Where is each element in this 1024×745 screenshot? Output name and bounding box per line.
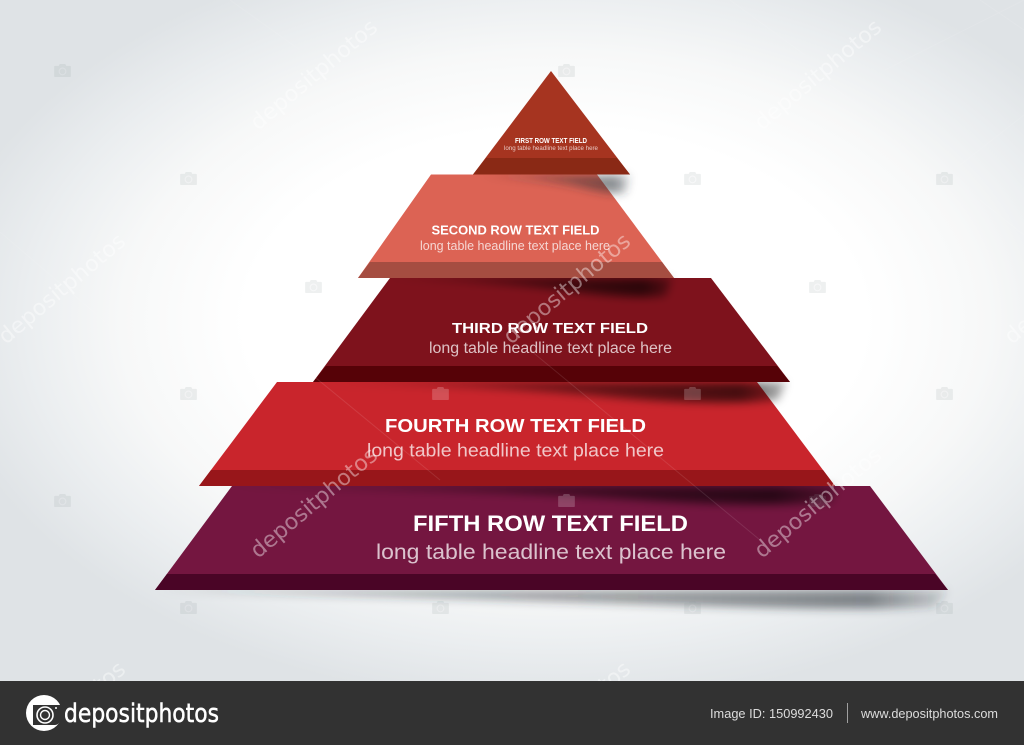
divider (847, 703, 848, 723)
tier: first row (473, 71, 630, 174)
shadow of second row (385, 278, 672, 297)
watermark text: depositphotos (750, 15, 887, 136)
drop shadow under fifth row (155, 590, 948, 609)
icon: camera logo (26, 695, 62, 731)
footer bar (0, 681, 1024, 745)
tier: third row (313, 278, 790, 382)
tier: fifth row (155, 486, 948, 590)
watermark text: depositphotos (499, 229, 636, 350)
third row text: THIRD ROW TEXT FIELD (452, 320, 648, 337)
watermark text: depositphotos (246, 15, 383, 136)
second row text (420, 224, 610, 253)
watermark text: depositphotos (750, 443, 887, 564)
fourth row text (367, 416, 664, 460)
watermark lattice lines (0, 0, 1024, 540)
tier: fourth row (199, 382, 835, 486)
fifth row text: FIFTH ROW TEXT FIELD (413, 511, 688, 536)
second row text: long table headline text place here (420, 238, 610, 253)
first row text: long table headline text place here (504, 145, 598, 152)
second row text: SECOND ROW TEXT FIELD (432, 224, 600, 238)
first row text: FIRST ROW TEXT FIELD (515, 138, 587, 145)
shadow of third row (325, 382, 786, 403)
shadow of fourth row (215, 486, 836, 505)
logo wordmark: depositphotos (64, 699, 219, 729)
fourth row text: FOURTH ROW TEXT FIELD (385, 416, 646, 436)
shadow of first row (480, 175, 630, 193)
tier: second row (358, 174, 674, 278)
first row text (504, 138, 598, 152)
fifth row text (376, 511, 726, 564)
image id: Image ID: 150992430 (710, 707, 833, 721)
watermark camera icons on background (54, 64, 953, 614)
third row text (429, 320, 672, 357)
fourth row text: long table headline text place here (367, 440, 664, 460)
website url: www.depositphotos.com (860, 707, 998, 721)
fifth row text: long table headline text place here (376, 541, 726, 564)
watermark camera icons on pyramid (432, 387, 701, 507)
watermark text: depositphotos (246, 443, 383, 564)
third row text: long table headline text place here (429, 340, 672, 357)
